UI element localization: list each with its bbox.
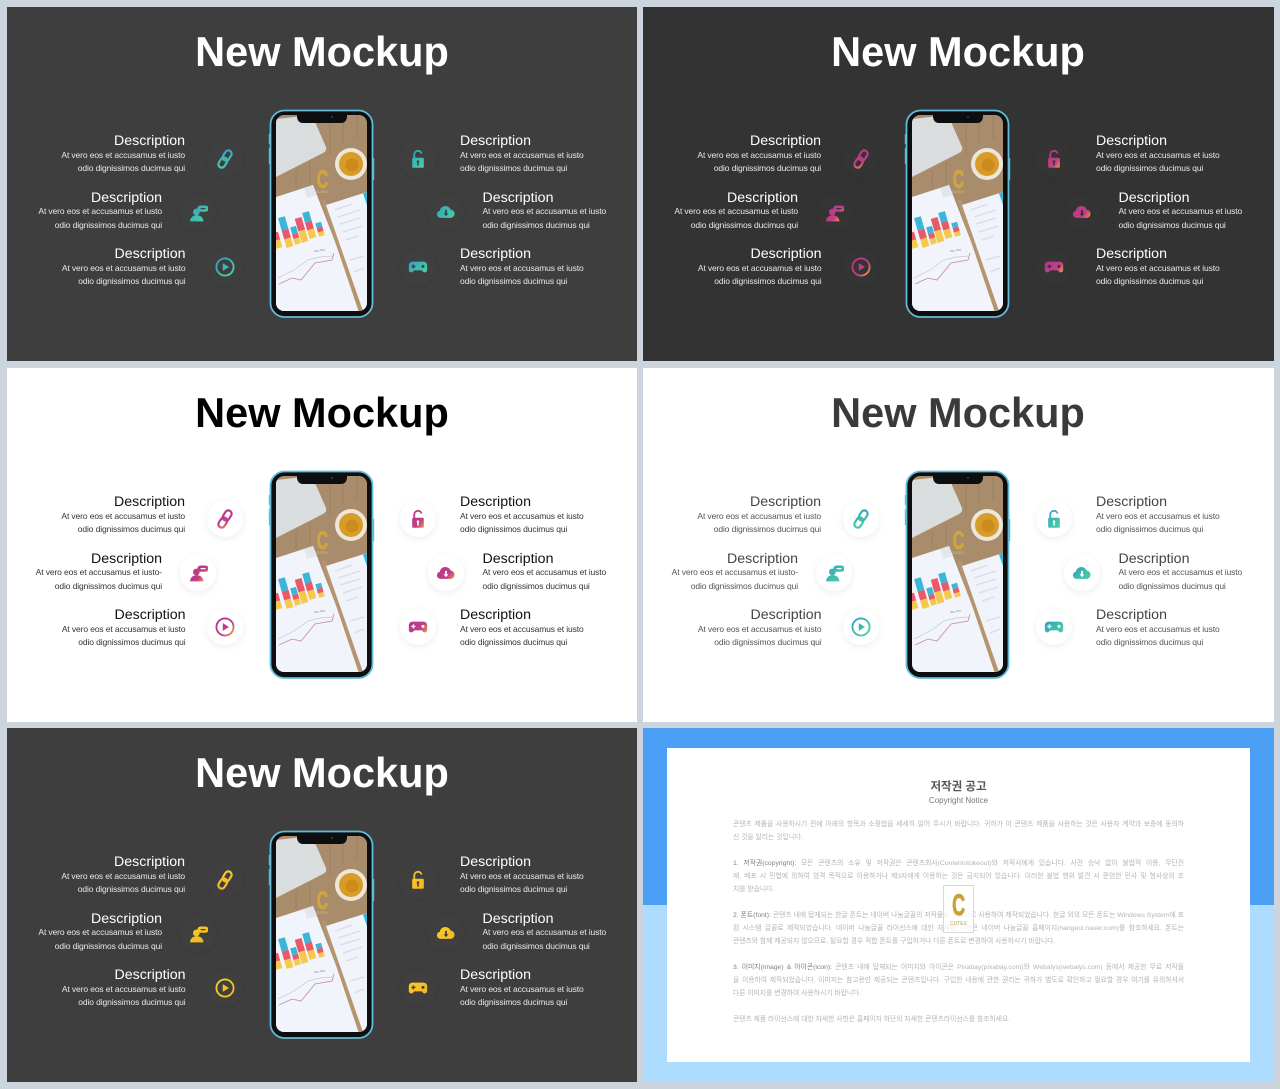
- text block: right description 1: At vero eos et accusamus et iusto: [460, 870, 584, 880]
- section 3 line 2: 을 이용하여 제작되었습니다. 이미지는 참고용만 제공되는 콘텐츠입니다. 구입한 내용에 관한 권리는 귀하가 별도로 확인하고 필요할 경우 여기를 유의하셔서: [733, 977, 1184, 984]
- text block: right description 2: Description: [1118, 550, 1189, 566]
- text block: left description 1: Description: [750, 133, 821, 149]
- section 1 line 1: 1. 저작권(copyright): 모든 콘텐츠의 소유 및 저작권은 콘텐츠회사(Contentstokeout)와 저작사에게 있습니다. 사전 승낙 없이 불법적 이용, 무단전: [733, 860, 1184, 867]
- text block: right description 3: At vero eos et accusamus et iusto: [460, 262, 584, 272]
- text block: right description 1: At vero eos et accusamus et iusto: [460, 510, 584, 520]
- text block: right description 1: odio dignissimos ducimus qui: [460, 524, 567, 534]
- icon: lock: [1036, 501, 1072, 537]
- text block: right description 1: odio dignissimos ducimus qui: [1096, 163, 1203, 173]
- text block: left description 1: At vero eos et accusamus et iusto: [61, 510, 185, 520]
- text block: left description 2: At vero eos et accusamus et iusto: [38, 206, 162, 216]
- icon: gamepad: [400, 249, 436, 285]
- icon: cloud: [428, 915, 464, 951]
- text block: right description 3: [460, 246, 584, 286]
- text block: right description 2: odio dignissimos ducimus qui: [482, 220, 590, 230]
- text block: right description 2: [1118, 190, 1242, 230]
- text block: left description 3: At vero eos et accusamus et iusto: [62, 624, 186, 634]
- text block: left description 3: Description: [115, 607, 186, 623]
- logo watermark: C: [952, 890, 965, 922]
- text block: right description 3: At vero eos et accusamus et iusto: [1096, 624, 1220, 634]
- text block: right description 3: [460, 607, 584, 647]
- icon: gamepad: [400, 970, 436, 1006]
- notice heading: 저작권 공고: [930, 778, 987, 794]
- text block: right description 3: At vero eos et accusamus et iusto: [1096, 262, 1220, 272]
- text block: left description 3: odio dignissimos ducimus qui: [714, 637, 822, 647]
- text block: left description 1: At vero eos et accusamus et iusto: [697, 150, 821, 160]
- icon: lock: [400, 501, 436, 537]
- text block: left description 1: At vero eos et accusamus et iusto: [61, 870, 185, 880]
- text block: right description 2: At vero eos et accusamus et iusto: [482, 927, 606, 937]
- text block: left description 3: odio dignissimos ducimus qui: [78, 276, 186, 286]
- text block: left description 3: Description: [751, 607, 822, 623]
- text block: left description 2: [38, 910, 162, 951]
- icon: play: [207, 970, 243, 1006]
- icon: cloud: [428, 555, 464, 591]
- text block: right description 2: odio dignissimos ducimus qui: [482, 581, 590, 591]
- phone mockup: C: [317, 527, 328, 555]
- phone mockup: C: [317, 887, 328, 915]
- phone mockup: C: [953, 166, 964, 194]
- phone mockup: [904, 470, 1010, 679]
- text block: left description 2: [674, 190, 798, 230]
- text block: right description 1: [460, 494, 584, 534]
- icon: chat person: [180, 195, 216, 231]
- icon: cloud: [1064, 555, 1100, 591]
- text block: right description 3: [460, 967, 584, 1007]
- text block: right description 3: Description: [460, 607, 531, 623]
- phone mockup: [904, 110, 1010, 318]
- icon: play: [207, 249, 243, 285]
- icon: link: [843, 141, 879, 177]
- text block: right description 1: [1096, 494, 1220, 534]
- phone mockup: C: [953, 527, 964, 555]
- notice subtitle: Copyright Notice: [929, 796, 988, 805]
- logo watermark: CUTEX: [950, 921, 968, 927]
- text block: right description 2: odio dignissimos ducimus qui: [1118, 581, 1226, 591]
- icon: gamepad: [1036, 609, 1072, 645]
- text block: right description 1: At vero eos et accusamus et iusto: [1096, 510, 1220, 520]
- title: New Mockup: [195, 749, 449, 796]
- section 2 line 3: 콘텐츠와 함께 제공되지 않으므로, 필요할 경우 적합 폰트를 구입하거나 다른 폰트로 변경하여 사용하시기 바랍니다.: [733, 938, 1055, 945]
- text block: right description 1: Description: [1096, 494, 1167, 510]
- text block: right description 2: [482, 550, 606, 591]
- text block: right description 1: Description: [1096, 133, 1167, 149]
- text block: left description 2: At vero eos et accusamus et iusto: [38, 927, 162, 937]
- section 1 line 2: 재, 배포 시 민법에 의하여 엄격 목적으로 이용하거나 제3자에게 이용하는 것은 금지되어 있습니다. 이러한 불법 행위 발견 시 준엄한 민사 및 형사상의 조: [733, 873, 1184, 880]
- text block: right description 3: odio dignissimos ducimus qui: [460, 637, 567, 647]
- panel: darker mockup slide, magenta icons: [643, 7, 1274, 361]
- text block: left description 3: [62, 967, 186, 1007]
- text block: left description 3: odio dignissimos ducimus qui: [78, 997, 186, 1007]
- phone mockup: C: [317, 166, 328, 194]
- text block: right description 3: At vero eos et accusamus et iusto: [460, 984, 584, 994]
- icon: play: [843, 609, 879, 645]
- text block: right description 3: odio dignissimos ducimus qui: [460, 997, 567, 1007]
- text block: left description 2: At vero eos et accusamus et iusto: [674, 206, 798, 216]
- phone mockup: [268, 470, 374, 679]
- section 2 line 2: 된 시스템 글꼴로 제작되었습니다. 네이버 나눔글꼴 라이선스에 대한 자세한 사항은 네이버 나눔글꼴 홈페이지(hangeul.naver.com)를 참조하세요. 폰트는: [733, 925, 1184, 932]
- text block: right description 2: At vero eos et accusamus et iusto: [482, 567, 606, 577]
- text block: left description 3: [62, 607, 186, 647]
- panel: copyright notice slide: [643, 728, 1274, 1082]
- text block: right description 2: At vero eos et accusamus et iusto: [1118, 567, 1242, 577]
- text block: left description 2: odio dignissimos ducimus qui: [55, 941, 162, 951]
- text block: left description 1: At vero eos et accusamus et iusto: [697, 510, 821, 520]
- text block: right description 2: At vero eos et accusamus et iusto: [482, 206, 606, 216]
- icon: link: [843, 501, 879, 537]
- text block: right description 1: odio dignissimos ducimus qui: [460, 163, 567, 173]
- phone mockup: CUTEX: [952, 551, 965, 555]
- text block: right description 3: [1096, 607, 1220, 647]
- text block: left description 1: odio dignissimos ducimus qui: [78, 163, 185, 173]
- panel: dark mockup slide, teal icons: [7, 7, 637, 361]
- phone mockup: CUTEX: [952, 190, 965, 194]
- text block: right description 2: Description: [482, 550, 553, 566]
- text block: right description 3: odio dignissimos ducimus qui: [1096, 276, 1203, 286]
- icon: lock: [400, 862, 436, 898]
- logo watermark: [943, 885, 974, 933]
- text block: left description 1: Description: [114, 854, 185, 870]
- text block: left description 2: odio dignissimos ducimus qui: [691, 220, 798, 230]
- section 3 line 1: 3. 이미지(image) & 아이콘(icon): 콘텐츠 내에 탑재되는 이미지와 아이콘은 Pixabay(pixabay.com)와 Webalys(webalys.com) 등에서 제공한 무료 저작물: [733, 964, 1184, 971]
- text block: left description 1: [61, 494, 185, 534]
- phone mockup: CUTEX: [316, 911, 329, 915]
- icon: lock: [400, 141, 436, 177]
- text block: right description 1: [1096, 133, 1220, 173]
- text block: right description 2: At vero eos et accusamus et iusto: [1118, 206, 1242, 216]
- text block: right description 2: odio dignissimos ducimus qui: [1118, 220, 1226, 230]
- phone mockup: [268, 110, 374, 318]
- text block: left description 1: odio dignissimos ducimus qui: [78, 884, 185, 894]
- text block: left description 3: Description: [115, 246, 186, 262]
- text block: left description 2: odio dignissimos ducimus qui: [55, 220, 162, 230]
- text block: left description 2: odio dignissimos ducimus qui: [691, 581, 798, 591]
- text block: left description 1: [61, 854, 185, 894]
- text block: left description 2: Description: [91, 190, 162, 206]
- icon: link: [207, 862, 243, 898]
- text block: left description 2: At vero eos et accusamus et iusto-: [36, 567, 162, 577]
- icon: chat person: [816, 555, 852, 591]
- text block: left description 1: Description: [114, 494, 185, 510]
- icon: chat person: [180, 555, 216, 591]
- phone mockup: [268, 830, 374, 1039]
- text block: left description 1: odio dignissimos ducimus qui: [78, 524, 185, 534]
- text block: right description 1: Description: [460, 494, 531, 510]
- text block: left description 1: Description: [114, 133, 185, 149]
- text block: left description 3: [62, 246, 186, 286]
- icon: play: [843, 249, 879, 285]
- text block: left description 2: [36, 550, 162, 591]
- text block: right description 2: Description: [482, 910, 553, 926]
- text block: right description 3: Description: [460, 967, 531, 983]
- text block: left description 3: At vero eos et accusamus et iusto: [62, 984, 186, 994]
- text block: right description 3: odio dignissimos ducimus qui: [1096, 637, 1203, 647]
- text block: right description 2: Description: [482, 190, 553, 206]
- text block: right description 1: At vero eos et accusamus et iusto: [460, 150, 584, 160]
- text block: right description 1: [460, 854, 584, 894]
- phone mockup: CUTEX: [316, 551, 329, 555]
- title: New Mockup: [195, 389, 449, 436]
- text block: left description 3: [698, 607, 822, 647]
- text block: right description 2: odio dignissimos ducimus qui: [482, 941, 590, 951]
- text block: left description 3: At vero eos et accusamus et iusto: [62, 262, 186, 272]
- text block: right description 2: [482, 910, 606, 951]
- text block: left description 3: At vero eos et accusamus et iusto: [698, 262, 822, 272]
- text block: right description 2: [1118, 550, 1242, 591]
- text block: right description 3: Description: [1096, 607, 1167, 623]
- title: New Mockup: [831, 28, 1085, 75]
- text block: left description 2: Description: [727, 550, 798, 566]
- text block: right description 3: odio dignissimos ducimus qui: [460, 276, 567, 286]
- section 3 line 3: 다른 이미지를 변경하여 사용하시기 바랍니다.: [733, 990, 861, 997]
- text block: left description 1: odio dignissimos ducimus qui: [714, 524, 821, 534]
- icon: link: [207, 501, 243, 537]
- title: New Mockup: [831, 389, 1085, 436]
- panel: dark mockup slide, yellow icons: [7, 728, 637, 1082]
- text block: left description 2: [672, 550, 798, 591]
- icon: cloud: [1064, 194, 1100, 230]
- text block: right description 1: Description: [460, 854, 531, 870]
- text block: left description 3: Description: [751, 246, 822, 262]
- text block: right description 2: Description: [1118, 190, 1189, 206]
- notice card: [667, 748, 1250, 1062]
- text block: left description 1: [697, 494, 821, 534]
- text block: right description 1: odio dignissimos ducimus qui: [460, 884, 567, 894]
- text block: left description 1: [697, 133, 821, 173]
- icon: gamepad: [1036, 249, 1072, 285]
- icon: gamepad: [400, 609, 436, 645]
- text block: left description 3: [698, 246, 822, 286]
- text block: left description 1: Description: [750, 494, 821, 510]
- text block: left description 3: At vero eos et accusamus et iusto: [698, 624, 822, 634]
- icon: cloud: [428, 194, 464, 230]
- text block: right description 2: [482, 190, 606, 230]
- text block: right description 1: [460, 133, 584, 173]
- notice intro line 2: 신 것을 알리는 것입니다.: [733, 834, 803, 841]
- text block: right description 1: At vero eos et accusamus et iusto: [1096, 150, 1220, 160]
- notice closing line: 콘텐츠 제품 라이선스에 대한 자세한 사항은 홈페이지 하단의 자세한 콘텐츠라이선스를 참조하세요.: [733, 1016, 1010, 1023]
- notice intro: 콘텐츠 제품을 사용하시기 전에 아래의 항목과 소정법을 세세히 읽어 주시기 바랍니다. 귀하가 이 콘텐츠 제품을 사용하는 것은 사용자 계약과 보증에 동의하: [733, 821, 1184, 828]
- text block: right description 3: At vero eos et accusamus et iusto: [460, 624, 584, 634]
- panel: white mockup slide, magenta icons: [7, 368, 637, 722]
- text block: right description 3: Description: [460, 246, 531, 262]
- phone mockup: CUTEX: [316, 190, 329, 194]
- text block: left description 2: Description: [727, 190, 798, 206]
- text block: left description 1: At vero eos et accusamus et iusto: [61, 150, 185, 160]
- text block: left description 2: odio dignissimos ducimus qui: [55, 581, 162, 591]
- text block: left description 2: Description: [91, 910, 162, 926]
- text block: right description 1: odio dignissimos ducimus qui: [1096, 524, 1203, 534]
- icon: chat person: [180, 916, 216, 952]
- text block: left description 3: Description: [115, 967, 186, 983]
- text block: left description 2: At vero eos et accusamus et iusto-: [672, 567, 798, 577]
- text block: right description 3: [1096, 246, 1220, 286]
- icon: lock: [1036, 141, 1072, 177]
- text block: left description 3: odio dignissimos ducimus qui: [714, 276, 822, 286]
- text block: left description 2: Description: [91, 550, 162, 566]
- text block: right description 1: Description: [460, 133, 531, 149]
- title: New Mockup: [195, 28, 449, 75]
- text block: left description 2: [38, 190, 162, 230]
- icon: chat person: [816, 195, 852, 231]
- section 1 line 3: 치를 받습니다.: [733, 886, 774, 893]
- icon: play: [207, 609, 243, 645]
- icon: link: [207, 141, 243, 177]
- text block: left description 3: odio dignissimos ducimus qui: [78, 637, 186, 647]
- panel: white mockup slide, teal icons: [643, 368, 1274, 722]
- text block: right description 3: Description: [1096, 246, 1167, 262]
- text block: left description 1: odio dignissimos ducimus qui: [714, 163, 821, 173]
- text block: left description 1: [61, 133, 185, 173]
